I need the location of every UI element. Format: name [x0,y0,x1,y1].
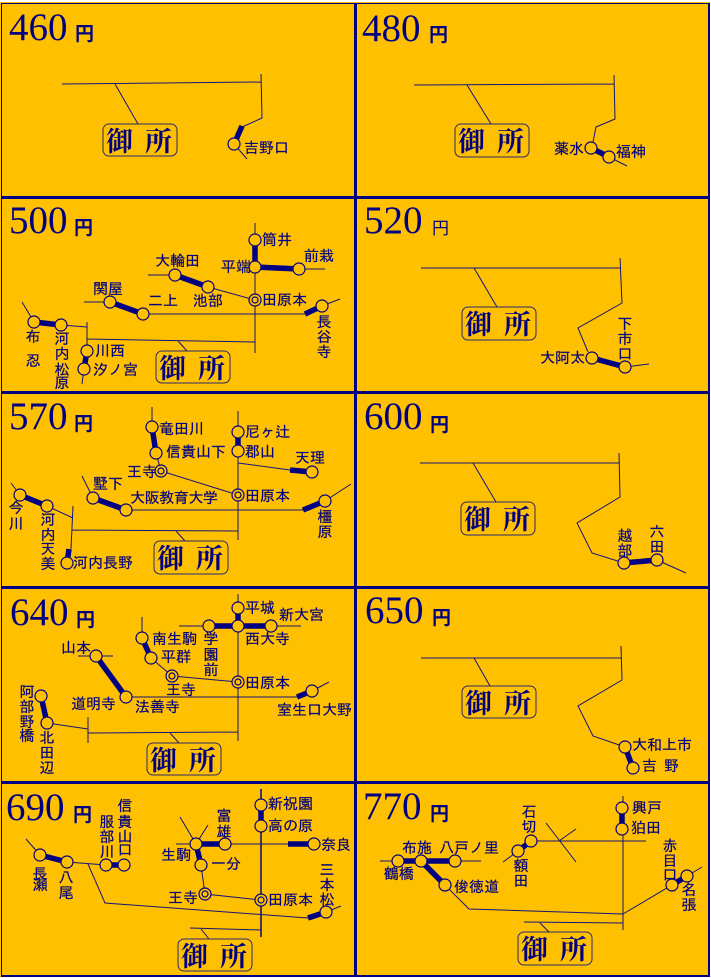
route map: 570 yen: 竜田川 [159,421,204,438]
panel: 600 yen [357,394,708,586]
fare: 640 yen [10,591,95,634]
route map: 500 yen: 原 [54,375,70,392]
fare: 460 yen: 460 [9,6,68,49]
destination box: 御所 [518,932,592,965]
route map: 650 yen: 吉 [642,758,657,775]
destination box: 御所: 所 [503,505,530,535]
destination box: 御所: 所 [189,746,216,776]
destination box: 御所 [461,502,535,535]
route map: 640 yen: 部 [20,699,34,716]
destination box: 御所 [147,743,221,776]
route map: 690 yen: 富 [216,808,232,825]
fare: 460 yen: 円 [75,24,94,45]
route map: 770 yen: 口 [662,867,678,884]
route map: 690 yen: 川 [100,844,114,861]
route map: 500 yen: 内 [54,346,70,363]
route map: 690 yen: 高の原 [268,818,313,835]
route map: 690 yen: 尾 [58,885,74,902]
route map: 650 yen [421,646,692,775]
route map: 570 yen: 原 [318,524,332,541]
destination box: 御所: 御 [159,354,186,384]
route map: 500 yen: 前栽 [304,248,334,265]
route map: 480 yen [414,75,646,166]
route map: 690 yen: 本 [320,877,334,894]
panel: 570 yen [2,394,354,586]
destination box: 御所 [103,124,177,157]
route map: 570 yen: 天理 [295,450,325,467]
route map: 480 yen: 福神 [616,144,646,161]
route map: 500 yen: 池部 [193,293,223,310]
destination box: 御所: 所 [145,127,172,157]
route map: 500 yen: 河 [54,331,70,348]
route map: 600 yen [420,453,686,573]
route map: 770 yen: 切 [522,819,536,836]
fare: 500 yen [9,199,93,242]
route map: 500 yen: 汐ノ宮 [93,362,138,379]
fare: 640 yen: 円 [76,610,95,631]
route map: 500 yen: 筒井 [262,232,292,249]
route map: 690 yen: 王寺 [168,890,198,907]
route map: 600 yen: 六 [650,524,664,541]
route map: 770 yen: 目 [662,853,678,870]
fare: 480 yen [362,7,448,50]
panel: 640 yen [2,589,354,781]
destination box: 御所: 御 [157,544,184,574]
destination box: 御所: 御 [458,127,485,157]
route map: 690 yen: 松 [320,892,334,909]
route map: 650 yen: 大和上市 [632,737,692,754]
route map: 770 yen: 狛田 [631,820,661,837]
route map: 640 yen: 阿 [20,684,34,701]
route map: 600 yen: 部 [618,543,632,560]
route map: 640 yen: 園 [204,647,218,664]
route map: 520 yen [421,258,649,373]
destination box: 御所 [462,686,536,719]
route map: 640 yen: 北 [40,730,54,747]
route map: 770 yen: 張 [682,897,696,914]
route map: 770 yen: 八戸ノ里 [439,840,499,857]
destination box: 御所: 御 [521,935,548,965]
route map: 500 yen [22,223,340,392]
route map: 690 yen: 瀬 [32,877,48,894]
route map: 640 yen: 室生口大野 [277,702,352,719]
route map: 570 yen: 尼ヶ辻 [245,424,290,441]
route map: 640 yen: 前 [204,662,218,679]
route map: 770 yen: 俊徳道 [454,879,499,896]
destination box: 御所 [462,307,536,340]
fare: 480 yen: 480 [362,7,420,50]
route map: 570 yen: 信貴山下 [166,444,226,461]
fare: 570 yen: 円 [74,414,93,435]
destination box: 御所 [154,541,228,574]
route map: 640 yen: 道明寺 [71,696,116,713]
route map: 770 yen: 鶴橋 [384,866,414,883]
panel: 770 yen [357,784,708,975]
route map: 640 yen: 南生駒 [152,631,197,648]
route map: 460 yen: 吉野口 [244,140,289,157]
route map: 520 yen: 口 [618,346,632,363]
route map: 500 yen: 田原本 [262,292,307,309]
route map: 690 yen: 八 [58,870,74,887]
fare: 520 yen: 520 [364,199,422,242]
route map: 640 yen: 学 [204,631,218,648]
destination box: 御所: 御 [181,942,208,972]
panel: 480 yen [357,4,708,196]
route map: 640 yen: 法善寺 [135,699,180,716]
route map: 500 yen: 平端 [221,259,251,276]
route map: 690 yen: 服 [100,814,114,831]
route map: 770 yen: 興戸 [632,800,662,817]
route map: 500 yen: 長 [316,314,332,331]
panel: 650 yen [357,589,708,781]
panel: 690 yen [2,784,354,975]
route map: 690 yen [26,789,351,939]
destination box: 御所: 御 [464,505,491,535]
fare: 600 yen: 円 [430,415,449,436]
fare: 570 yen [9,395,93,438]
route map: 520 yen: 市 [618,331,632,348]
destination box: 御所 [178,939,252,972]
fare: 650 yen: 650 [365,589,424,632]
route map: 570 yen: 今 [8,500,24,517]
route map: 640 yen: 田原本 [245,675,290,692]
panel: 520 yen [357,199,708,391]
fare: 600 yen: 600 [364,395,422,438]
route map: 770 yen: 赤 [662,838,678,855]
destination box: 御所 [455,124,529,157]
route map: 640 yen: 平城 [245,600,275,617]
route map: 500 yen: 寺 [316,344,332,361]
route map: 690 yen: 貴 [118,814,132,831]
route map: 640 yen: 王寺 [166,682,196,699]
route map: 570 yen: 墅下 [93,476,123,493]
route map: 500 yen: 谷 [316,329,332,346]
fare: 520 yen: 円 [432,219,449,238]
route map: 690 yen: 田原本 [268,892,313,909]
fare: 500 yen: 500 [9,199,68,242]
destination box: 御所: 所 [198,354,225,384]
route map: 690 yen: 生駒 [161,847,191,864]
route map: 690 yen: 雄 [216,824,232,841]
route map: 500 yen: 大輪田 [155,253,200,270]
route map: 770 yen: 田 [514,873,528,890]
route map: 570 yen: 河内長野 [73,555,133,572]
fare: 650 yen: 円 [432,608,451,629]
fare: 770 yen: 770 [363,785,422,828]
fare: 770 yen: 円 [430,804,449,825]
fare: 640 yen: 640 [10,591,68,634]
route map: 770 yen: 名 [682,882,696,899]
fare: 690 yen [6,786,92,829]
route map: 600 yen: 田 [650,539,664,556]
destination box: 御所: 所 [497,127,524,157]
route map: 640 yen [20,594,352,777]
route map: 690 yen: 新祝園 [268,796,313,813]
route map: 690 yen: 長 [32,866,48,883]
route map: 690 yen: 奈良 [321,837,351,854]
fare: 460 yen [9,6,94,49]
route map: 690 yen: 三 [320,862,334,879]
destination box: 御所: 所 [504,689,531,719]
destination box: 御所: 御 [465,310,492,340]
route map: 570 yen: 河 [40,512,56,529]
destination box: 御所: 所 [504,310,531,340]
route map: 500 yen: 忍 [26,353,40,370]
route map: 770 yen: 石 [522,804,536,821]
route map: 570 yen [8,407,351,573]
route map: 520 yen: 下 [618,316,632,333]
route map: 500 yen: 関屋 [93,281,123,298]
route map: 600 yen: 越 [618,528,632,545]
fare: 500 yen: 円 [74,218,93,239]
route map: 640 yen: 野 [20,714,34,731]
route map: 500 yen: 布 [26,329,40,346]
destination box: 御所: 御 [465,689,492,719]
route map: 770 yen: 布施 [402,840,432,857]
route map: 570 yen: 田原本 [245,488,290,505]
destination box: 御所: 所 [196,544,223,574]
destination box: 御所: 所 [220,942,247,972]
route map: 640 yen: 新大宮 [279,607,324,624]
destination box: 御所 [156,351,230,384]
route map: 570 yen: 天 [40,541,56,558]
route map: 690 yen: 信 [118,798,132,815]
destination box: 御所: 所 [560,935,587,965]
route map: 770 yen: 額 [514,858,528,875]
destination box: 御所: 御 [106,127,133,157]
route map: 690 yen: 部 [100,829,114,846]
route map: 690 yen: 口 [118,842,132,859]
route map: 690 yen: 山 [118,829,132,846]
route map: 570 yen: 美 [40,556,56,573]
route map: 640 yen: 西大寺 [245,631,290,648]
route map: 640 yen: 田 [40,745,54,762]
route map: 520 yen: 大阿太 [540,350,585,367]
route map: 640 yen: 橋 [20,728,34,745]
route map: 640 yen: 辺 [40,760,54,777]
route map: 640 yen: 平群 [161,649,191,666]
fare: 770 yen [363,785,449,828]
route map: 770 yen [380,796,702,932]
fare: 480 yen: 円 [429,25,448,46]
fare: 690 yen: 690 [6,786,64,829]
panel: 460 yen [2,4,354,196]
route map: 570 yen: 内 [40,527,56,544]
fare: 570 yen: 570 [9,395,68,438]
route map: 690 yen: 一分 [211,856,241,873]
route map: 650 yen: 野 [664,758,679,775]
route map: 570 yen: 郡山 [245,444,275,461]
route map: 570 yen: 大阪教育大学 [130,490,218,507]
route map: 570 yen: 王寺 [127,464,157,481]
route map: 480 yen: 薬水 [554,141,584,158]
fare: 520 yen [364,199,449,242]
destination box: 御所: 御 [150,746,177,776]
fare: 600 yen [364,395,449,438]
route map: 500 yen: 川西 [95,343,125,360]
route map: 500 yen: 二上 [148,293,178,310]
route map: 570 yen: 橿 [318,509,332,526]
route map: 460 yen [62,74,289,159]
fare: 650 yen [365,589,451,632]
route map: 640 yen: 山本 [61,640,91,657]
fare: 690 yen: 円 [73,805,92,826]
route map: 500 yen: 松 [54,362,70,379]
panel: 500 yen [2,199,354,392]
route map: 570 yen: 川 [8,516,24,533]
